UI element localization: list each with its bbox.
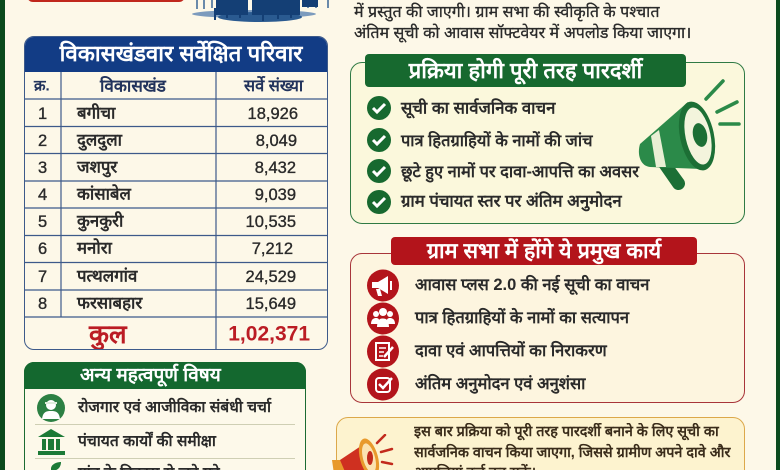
check item 1: सूची का सार्वजनिक वाचन [401, 99, 555, 118]
table rows: 8 [38, 295, 47, 313]
task 3: resolving claims [367, 336, 608, 368]
panel heading: transparent process [365, 54, 686, 87]
table rows: 8,432 [255, 159, 296, 177]
column headers: क्र. [34, 78, 50, 94]
check item 2: पात्र हितग्राहियों के नामों की जांच [401, 132, 592, 150]
table rows: 1 [38, 105, 47, 123]
divider: topic rows [35, 424, 295, 459]
topic: panchayat works review: पंचायत कार्यों की समीक्षा [78, 433, 216, 450]
check item 3: छूटे हुए नामों पर दावा-आपत्ति का अवसर [401, 163, 639, 181]
intro text: में प्रस्तुत की जाएगी। ग्राम सभा की स्वीकृति के पश्चात [354, 4, 659, 21]
column headers: विकासखंड [100, 76, 166, 96]
table rows [38, 103, 298, 313]
table rows: मनोरा [77, 239, 112, 258]
table rows: बगीचा [77, 104, 115, 123]
panel: key gram sabha tasks [350, 253, 745, 403]
task 1: reading list: आवास प्लस 2.0 की नई सूची का वाचन [415, 276, 649, 294]
table rows: 15,649 [246, 295, 296, 313]
table grid [25, 72, 327, 349]
icon: green megaphone [638, 79, 741, 190]
panel: block-wise surveyed families table [24, 36, 328, 350]
note text: सार्वजनिक वाचन किया जाएगा, जिससे ग्रामीण अपने दावे और [414, 445, 730, 461]
top red banner remnant [27, 0, 185, 2]
table rows: जशपुर [77, 158, 117, 177]
task 4: final approval: अंतिम अनुमोदन एवं अनुशंसा [415, 375, 585, 393]
table rows: कांसाबेल [77, 185, 131, 204]
table total row [88, 319, 310, 349]
table rows: 5 [38, 213, 47, 231]
illustration: villagers meeting silhouette [192, 0, 329, 22]
table rows: 9,039 [255, 186, 296, 204]
intro text: अंतिम सूची को आवास सॉफ्टवेयर में अपलोड किया जाएगा। [354, 25, 691, 42]
table rows: 24,529 [246, 268, 296, 286]
note text [414, 423, 731, 470]
task 3: resolving claims: दावा एवं आपत्तियों का निराकरण [415, 342, 607, 360]
task 2: verifying names [367, 302, 630, 334]
panel heading: key gram sabha tasks [391, 237, 697, 265]
table rows: 10,535 [246, 213, 296, 231]
table rows: 3 [38, 159, 47, 177]
topic: employment and livelihood: रोजगार एवं आजीविका संबंधी चर्चा [78, 399, 271, 416]
task list [367, 270, 650, 400]
table rows: 8,049 [256, 132, 297, 150]
right border band [776, 0, 780, 470]
table rows: 18,926 [248, 105, 298, 123]
table rows: 6 [38, 240, 47, 258]
table rows: 7,212 [252, 240, 293, 258]
table total row: 1,02,371 [228, 322, 310, 346]
icon: worker [37, 394, 65, 422]
panel heading: key gram sabha tasks: ग्राम सभा में होंगे ये प्रमुख कार्य [427, 238, 661, 263]
check item 2 [367, 128, 594, 152]
panel: other important topics [24, 362, 306, 470]
intro text [354, 2, 691, 43]
note text: इस बार प्रक्रिया को पूरी तरह पारदर्शी बनाने के लिए सूची का [414, 424, 719, 440]
table rows: दुलदुला [77, 131, 122, 150]
table heading: विकासखंडवार सर्वेक्षित परिवार [60, 41, 302, 66]
icon: plant [51, 462, 61, 470]
task 2: verifying names: पात्र हितग्राहियों के नामों का सत्यापन [415, 309, 629, 327]
table rows: पत्थलगांव [77, 267, 137, 286]
table rows: कुनकुरी [77, 212, 123, 231]
panel: transparency note [336, 417, 745, 470]
panel heading: transparent process: प्रक्रिया होगी पूरी तरह पारदर्शी [409, 58, 642, 83]
icon: red megaphone [332, 434, 394, 470]
left border band [0, 0, 5, 470]
panel heading: अन्य महत्वपूर्ण विषय [80, 365, 221, 386]
table heading [24, 36, 328, 72]
table rows: 4 [38, 186, 47, 204]
table rows: 2 [38, 132, 47, 150]
table rows: 7 [38, 268, 47, 286]
check item 1 [367, 96, 556, 120]
panel heading [24, 362, 306, 389]
icon: panchayat building [38, 429, 65, 455]
task 4: final approval [367, 368, 586, 400]
column headers [34, 76, 304, 96]
table total row: कुल [89, 319, 127, 349]
column headers: सर्वे संख्या [244, 77, 303, 95]
check item 3 [367, 159, 640, 183]
check item 4: ग्राम पंचायत स्तर पर अंतिम अनुमोदन [401, 192, 622, 211]
checklist [367, 96, 640, 214]
task 1: reading list [367, 270, 650, 302]
check item 4 [367, 190, 622, 214]
table rows: फरसाबहार [77, 294, 142, 313]
panel: transparent process [350, 62, 745, 224]
